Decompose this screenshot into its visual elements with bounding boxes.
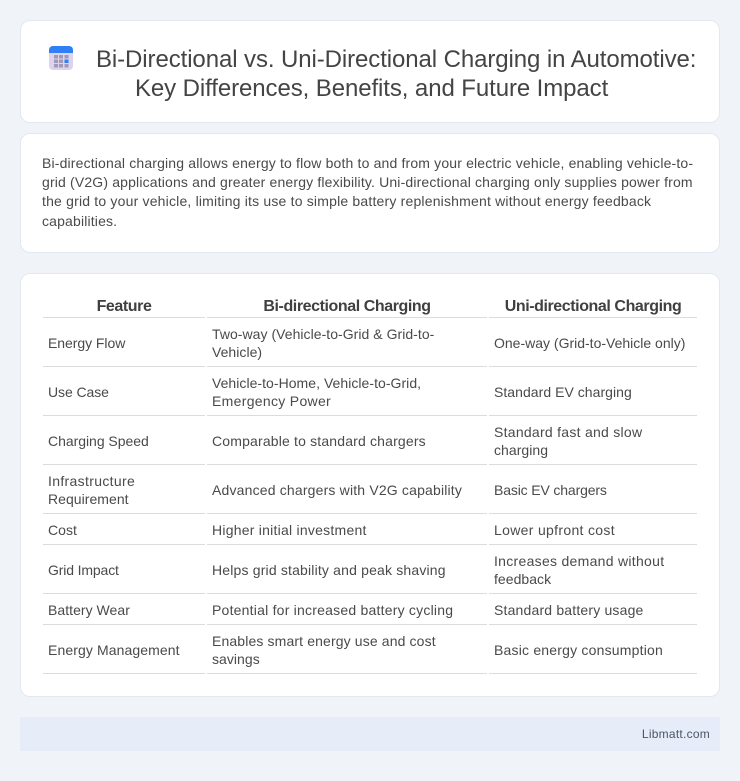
comparison table: Vehicle-to-Home, Vehicle-to-Grid,	[212, 375, 421, 391]
comparison table: Two-way (Vehicle-to-Grid & Grid-to-	[212, 326, 434, 342]
comparison table: feedback	[494, 571, 551, 587]
panel: summary card	[20, 133, 720, 253]
comparison table: Increases demand without	[494, 553, 664, 569]
comparison table: Comparable to standard chargers	[212, 433, 426, 449]
footer bar	[20, 717, 720, 751]
icon: calendar	[49, 46, 73, 70]
comparison table: Emergency Power	[212, 393, 331, 409]
comparison table: Lower upfront cost	[494, 522, 615, 538]
comparison table: Energy Management	[48, 642, 180, 658]
title	[96, 46, 696, 102]
comparison table	[43, 298, 697, 674]
comparison table: savings	[212, 651, 260, 667]
footer source text: Libmatt.com	[642, 727, 710, 741]
comparison table: Standard EV charging	[494, 384, 632, 400]
comparison table: Advanced chargers with V2G capability	[212, 482, 462, 498]
comparison table: Helps grid stability and peak shaving	[212, 562, 446, 578]
comparison table: Battery Wear	[48, 602, 130, 618]
summary text: the grid to your vehicle, limiting its use to simple battery replenishment without energy feedback	[42, 193, 651, 209]
comparison table: Vehicle)	[212, 344, 262, 360]
comparison table: Requirement	[48, 491, 129, 507]
title: Key Differences, Benefits, and Future Impact	[135, 75, 608, 102]
summary text	[42, 155, 693, 229]
comparison table: Standard battery usage	[494, 602, 644, 618]
comparison table: Cost	[48, 522, 77, 538]
comparison table: One-way (Grid-to-Vehicle only)	[494, 335, 685, 351]
comparison table: Grid Impact	[48, 562, 119, 578]
title: Bi-Directional vs. Uni-Directional Charging in Automotive:	[96, 46, 696, 73]
panel: comparison table card	[20, 273, 720, 697]
panel: title card	[20, 20, 720, 123]
summary text: Bi-directional charging allows energy to flow both to and from your electric vehicle, enabling vehicle-to-	[42, 155, 693, 171]
summary text: capabilities.	[42, 213, 117, 229]
comparison table: charging	[494, 442, 548, 458]
comparison table: Enables smart energy use and cost	[212, 633, 436, 649]
comparison table: Uni-directional Charging	[505, 298, 681, 315]
comparison table: Use Case	[48, 384, 109, 400]
comparison table: Infrastructure	[48, 473, 135, 489]
comparison table: Potential for increased battery cycling	[212, 602, 453, 618]
comparison table: Standard fast and slow	[494, 424, 642, 440]
comparison table: Basic energy consumption	[494, 642, 663, 658]
comparison table: Feature	[97, 298, 151, 315]
summary text: grid (V2G) applications and greater energy flexibility. Uni-directional charging only supplies power from	[42, 174, 693, 190]
comparison table: Basic EV chargers	[494, 482, 607, 498]
comparison table: Energy Flow	[48, 335, 125, 351]
comparison table: Bi-directional Charging	[263, 298, 431, 315]
comparison table: Higher initial investment	[212, 522, 367, 538]
comparison table: Charging Speed	[48, 433, 149, 449]
